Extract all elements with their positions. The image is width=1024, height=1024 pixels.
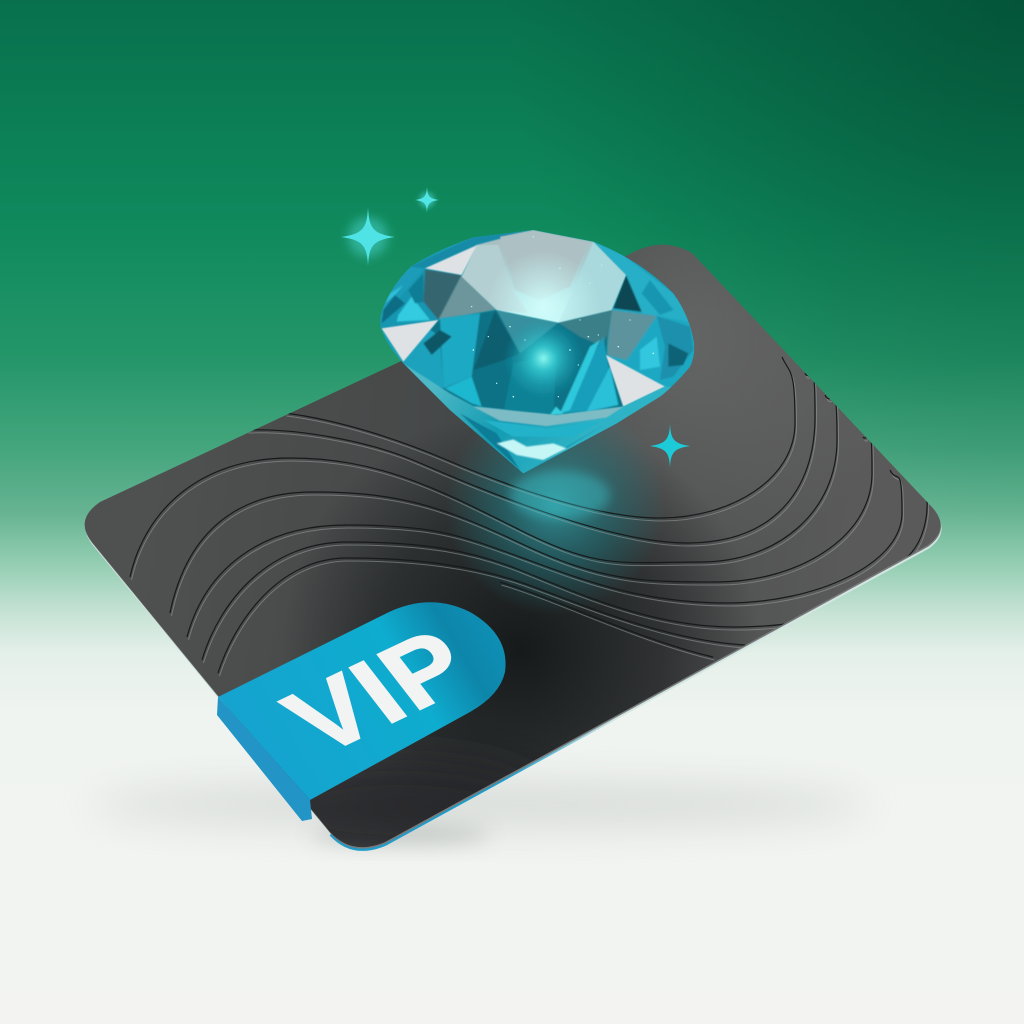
card face — [85, 245, 941, 847]
left crown facets — [380, 232, 524, 329]
diamond outline base — [373, 223, 700, 480]
card blue edge accent — [330, 704, 640, 850]
diamond sparkle dots — [471, 236, 654, 397]
card shading — [308, 244, 802, 848]
icon: diamond reflection glow — [510, 471, 610, 519]
girdle and lower pavilion — [403, 363, 673, 475]
ground shadow — [90, 781, 870, 829]
icon: sparkle beside diamond — [650, 424, 690, 468]
tab folded side — [217, 697, 312, 821]
icon: diamond — [373, 223, 700, 480]
card light edge — [86, 248, 942, 851]
VIP label: VIP — [265, 610, 493, 775]
card wave engraving — [130, 357, 929, 676]
icon: small sparkle — [415, 186, 439, 213]
lower pavilion highlight — [497, 439, 567, 460]
right crown facets — [596, 242, 694, 386]
pavilion facets — [403, 310, 623, 415]
background top-right shade — [0, 0, 1024, 620]
card dark edge — [85, 246, 941, 849]
diamond body — [373, 223, 700, 480]
contact shadow — [310, 825, 490, 845]
badge: VIP tab — [217, 602, 506, 821]
panel: black VIP card — [60, 220, 960, 860]
white facets — [382, 245, 665, 407]
table facet — [460, 230, 627, 323]
icon: large sparkle — [341, 207, 395, 266]
tab face — [218, 602, 506, 800]
